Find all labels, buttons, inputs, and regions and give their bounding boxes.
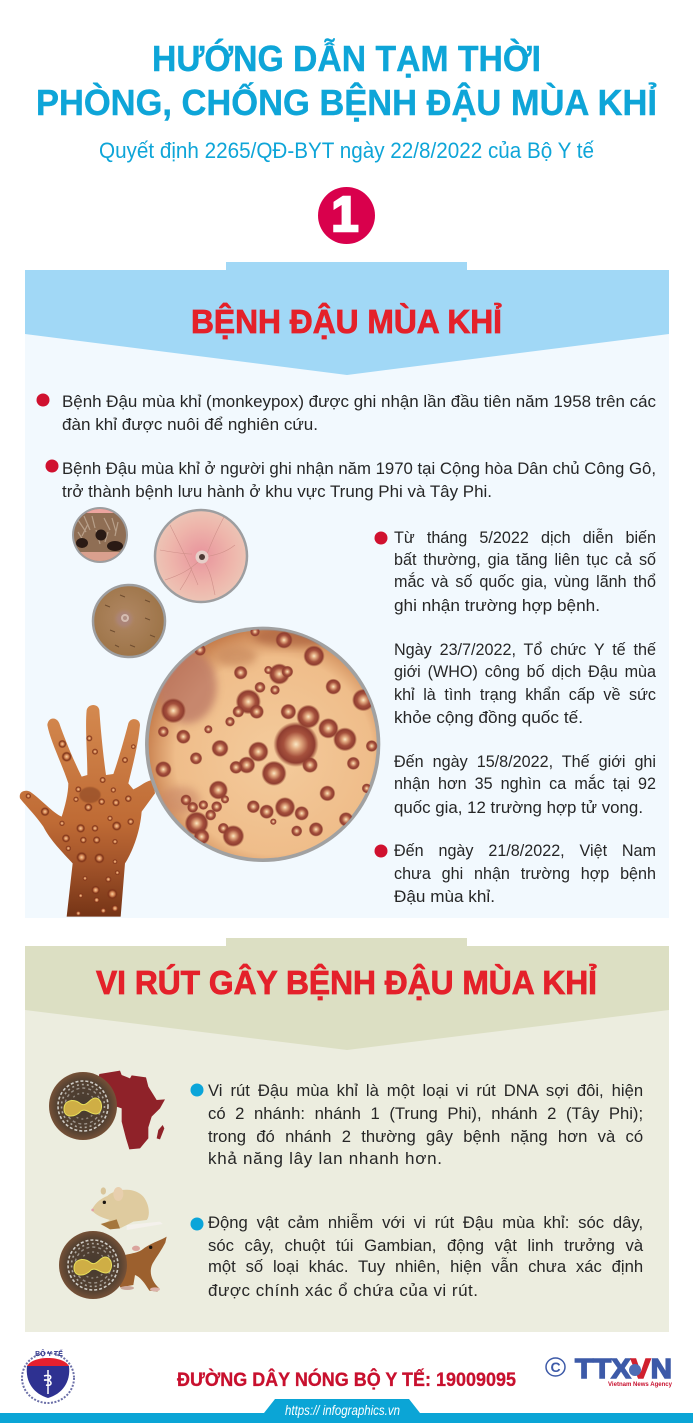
logo: bộ y tế: BỘ Y TẾ	[35, 1348, 63, 1358]
footer url: https:// infographics.vn	[285, 1402, 400, 1418]
icon: mouse	[91, 1187, 163, 1230]
text block: outbreak timeline: giới (WHO) công bố dịch Đậu mùa	[394, 662, 656, 681]
text block: susceptible animals	[190, 1213, 653, 1300]
number badge	[318, 187, 375, 244]
icon: africa map	[97, 1071, 165, 1149]
title	[36, 37, 657, 123]
icon: skin lesion photo pink	[155, 510, 247, 602]
text block: susceptible animals: sóc cây, chuột túi Gambian, động vật linh trưởng và	[208, 1236, 643, 1255]
text block: history: đàn khỉ được nuôi để nghiên cứu.	[62, 415, 318, 434]
heading: BỆNH ĐẬU MÙA KHỈ	[191, 303, 502, 340]
panel header: olive chevron	[25, 938, 669, 1050]
icon: skin lesion photo small	[72, 507, 128, 564]
text block: outbreak timeline: Đến ngày 21/8/2022, Việt Nam	[394, 841, 656, 860]
text block: history: trở thành bệnh lưu hành ở khu vực Trung Phi và Tây Phi.	[62, 482, 492, 501]
text block: virus description: trong đó nhánh 2 thường gây bệnh nặng hơn và có	[208, 1127, 643, 1146]
panel: vi rút gây bệnh	[25, 938, 669, 1332]
hotline: ĐƯỜNG DÂY NÓNG BỘ Y TẾ: 19009095	[177, 1369, 516, 1391]
text block: outbreak timeline: Ngày 23/7/2022, Tổ chức Y tế thế	[394, 640, 656, 659]
icon: magnified lesions photo	[145, 627, 380, 862]
logo: ttxvn: C	[550, 1359, 561, 1375]
text block: virus description: Vi rút Đậu mùa khỉ là một loại vi rút DNA sợi đôi, hiện	[208, 1081, 643, 1100]
text block: virus description: có 2 nhánh: nhánh 1 (Trung Phi), nhánh 2 (Tây Phi);	[208, 1104, 643, 1123]
text block: susceptible animals: Động vật cảm nhiễm với vi rút Đậu mùa khỉ: sóc dây,	[208, 1213, 643, 1232]
title: HƯỚNG DẪN TẠM THỜI	[152, 37, 541, 79]
logo: ttxvn	[546, 1353, 672, 1388]
text block: outbreak timeline: Từ tháng 5/2022 dịch diễn biến	[394, 528, 656, 547]
footer bar	[0, 1399, 693, 1423]
text block: history	[36, 392, 656, 501]
text block: outbreak timeline	[374, 528, 664, 906]
title: PHÒNG, CHỐNG BỆNH ĐẬU MÙA KHỈ	[36, 81, 657, 123]
text block: virus description: khả năng lây lan nhanh hơn.	[208, 1149, 442, 1168]
logo: ttxvn: Vietnam News Agency	[608, 1381, 672, 1388]
text block: outbreak timeline: bất thường, gia tăng liên tục cả số	[394, 550, 656, 569]
text block: susceptible animals: một số loại khác. Tuy nhiên, hiện vẫn chưa xác định	[208, 1257, 643, 1276]
text block: outbreak timeline: chưa ghi nhận trường hợp bệnh	[394, 864, 656, 883]
icon: virus particle 1	[49, 1072, 117, 1140]
text block: outbreak timeline: mắc và số quốc gia, vùng lãnh thổ	[394, 572, 656, 591]
text block: history: Bệnh Đậu mùa khỉ ở người ghi nhận năm 1970 tại Cộng hòa Dân chủ Công Gô,	[62, 459, 656, 478]
number badge: 1	[331, 188, 359, 242]
icon: shrew	[120, 1237, 167, 1292]
text block: outbreak timeline: khỏe cộng đồng quốc tế.	[394, 708, 583, 727]
text block: outbreak timeline: quốc gia, 12 trường hợp tử vong.	[394, 798, 643, 817]
icon: virus particle 2	[59, 1231, 127, 1299]
text block: outbreak timeline: nhận hơn 35 nghìn ca mắc tại 92	[394, 774, 656, 793]
icon: skin lesion photo tan	[93, 585, 165, 657]
text block: outbreak timeline: khỉ là tình trạng khẩn cấp về sức	[394, 685, 656, 704]
panel: bệnh đậu mùa khỉ	[20, 262, 669, 918]
icon: hand with lesions	[20, 705, 155, 917]
text block: outbreak timeline: Đậu mùa khỉ.	[394, 887, 495, 906]
text block: outbreak timeline: Đến ngày 15/8/2022, Thế giới ghi	[394, 752, 656, 771]
text block: history: Bệnh Đậu mùa khỉ (monkeypox) được ghi nhận lần đầu tiên năm 1958 trên các	[62, 392, 656, 411]
text block: outbreak timeline: ghi nhận trường hợp bệnh.	[394, 596, 600, 615]
heading: VI RÚT GÂY BỆNH ĐẬU MÙA KHỈ	[96, 964, 597, 1001]
panel header: blue chevron	[25, 262, 669, 375]
logo: ttxvn: TTXVN	[575, 1353, 672, 1384]
text block: virus description	[190, 1081, 653, 1168]
logo: bộ y tế	[22, 1348, 74, 1403]
subtitle: Quyết định 2265/QĐ-BYT ngày 22/8/2022 của Bộ Y tế	[99, 138, 594, 163]
text block: susceptible animals: được chính xác ổ chứa của vi rút.	[208, 1281, 478, 1300]
